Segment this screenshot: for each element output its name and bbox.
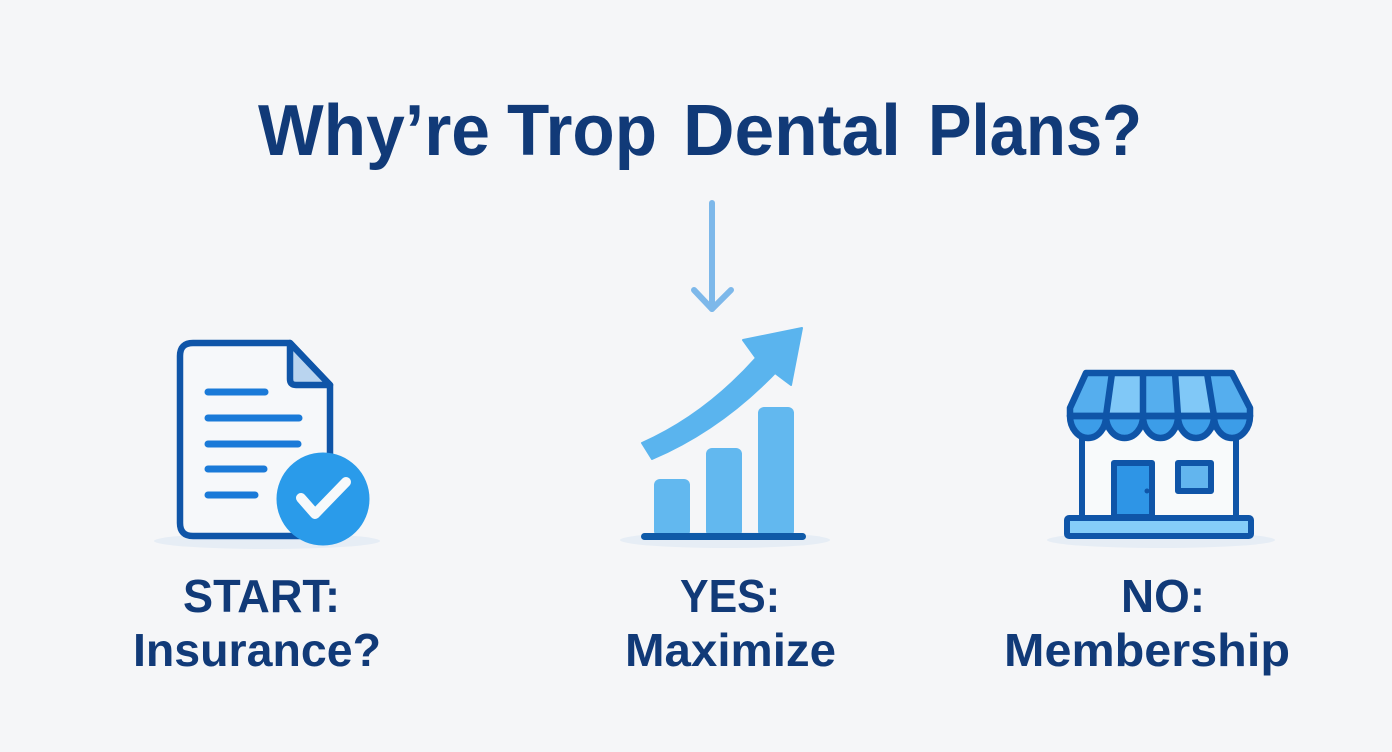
label: start insurance [133, 570, 381, 676]
label: start insurance: Insurance? [133, 624, 381, 676]
label: yes maximize: Maximize [625, 624, 836, 676]
title: Dental [683, 91, 901, 171]
title [258, 91, 1142, 171]
title: Plans? [928, 91, 1142, 171]
panel: no membership [1004, 373, 1290, 676]
icon: document with check [154, 343, 380, 549]
title: Trop [507, 91, 657, 171]
arrow: down from title to middle icon [694, 203, 731, 309]
label: yes maximize [625, 570, 836, 676]
label: yes maximize: YES: [680, 570, 780, 622]
panel: start insurance [133, 343, 381, 676]
icon: growth chart [620, 328, 830, 548]
panel: yes maximize [620, 328, 836, 676]
icon: storefront [1047, 373, 1275, 548]
label: start insurance: START: [183, 570, 340, 622]
label: no membership: Membership [1004, 624, 1290, 676]
label: no membership: NO: [1121, 570, 1205, 622]
label: no membership [1004, 570, 1290, 676]
title: Why’re [258, 91, 490, 171]
